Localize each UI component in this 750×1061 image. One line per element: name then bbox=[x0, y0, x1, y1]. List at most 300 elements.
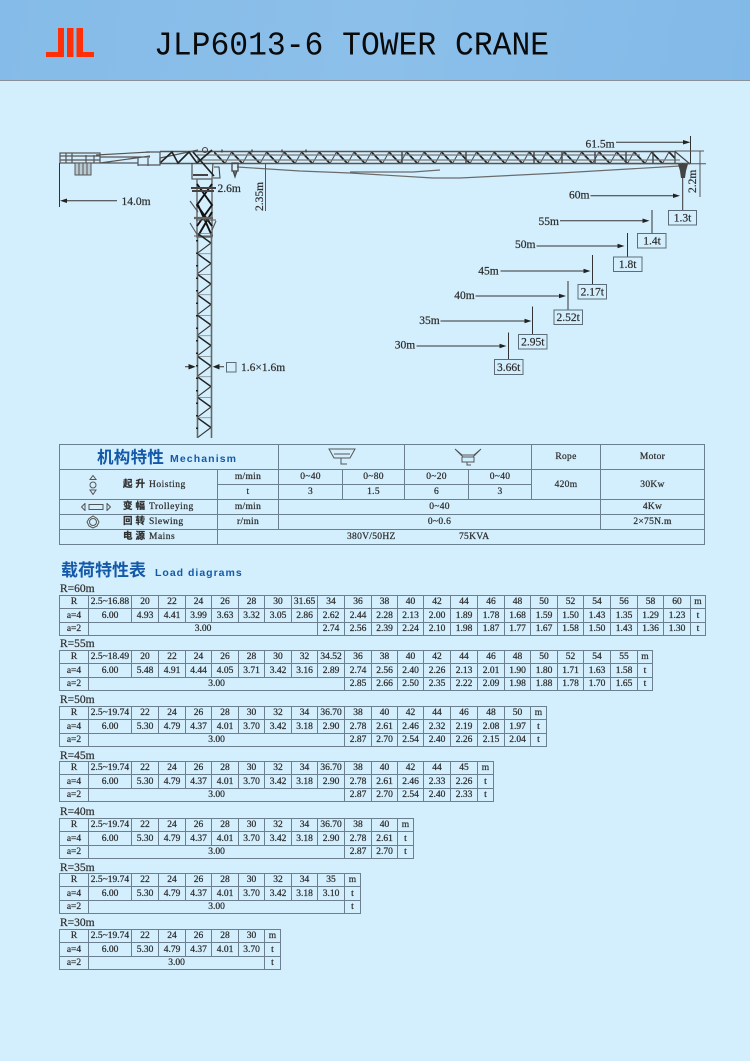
load table R=45m: 42 bbox=[406, 763, 415, 773]
load table R=40m: a=2 bbox=[67, 847, 81, 857]
mechanism heading: 机构特性 bbox=[97, 449, 164, 467]
mechanism table: 3 bbox=[308, 487, 313, 497]
counter jib bbox=[60, 150, 198, 166]
mechanism table: m/min bbox=[235, 502, 261, 512]
load table R=50m: 4.79 bbox=[164, 722, 180, 732]
load table R=45m: 2.78 bbox=[350, 777, 366, 787]
mechanism table: Trolleying bbox=[149, 502, 194, 512]
load table R=60m: 1.36 bbox=[642, 624, 659, 634]
mechanism table: 2×75N.m bbox=[633, 517, 672, 527]
load table R=45m: 28 bbox=[220, 763, 230, 773]
load table R=45m: 6.00 bbox=[102, 777, 118, 787]
load table R=40m: 26 bbox=[194, 820, 203, 830]
load table R=55m: 2.40 bbox=[402, 666, 419, 676]
load table R=60m: 3.99 bbox=[190, 611, 207, 621]
load table R=50m: 5.30 bbox=[137, 722, 153, 732]
load table R=55m: 2.5~18.49 bbox=[91, 652, 129, 662]
load table R=50m: a=2 bbox=[67, 735, 81, 745]
mechanism table: 6 bbox=[434, 487, 439, 497]
load table R=55m: 6.00 bbox=[102, 666, 118, 676]
load table R=40m: 36.70 bbox=[320, 820, 342, 830]
load table R=30m: 4.37 bbox=[190, 945, 207, 955]
load table R=55m: 2.66 bbox=[376, 679, 393, 689]
load table R=60m: R bbox=[71, 597, 77, 607]
load table R=45m: 36.70 bbox=[320, 763, 342, 773]
load table R=60m: 20 bbox=[140, 597, 150, 607]
load table R=60m: 38 bbox=[380, 597, 389, 607]
load table R=60m: 24 bbox=[194, 597, 203, 607]
load table R=60m: 52 bbox=[566, 597, 575, 607]
load marker: 50m 1.8t: 50m bbox=[515, 239, 536, 251]
load marker: 35m 2.95t: 35m bbox=[419, 315, 440, 327]
load table R=35m: 35 bbox=[326, 875, 336, 885]
load table R=40m: 40 bbox=[380, 820, 389, 830]
load table R=35m: 28 bbox=[220, 875, 230, 885]
load table R=50m: 2.15 bbox=[483, 735, 499, 745]
mechanism table bbox=[59, 444, 705, 545]
load table R=50m: 32 bbox=[273, 708, 283, 718]
load table R=60m: 2.28 bbox=[376, 611, 393, 621]
load table R=45m: 30 bbox=[247, 763, 256, 773]
load table R=55m: 52 bbox=[566, 652, 575, 662]
load table R=35m: R bbox=[71, 875, 77, 885]
load table R=50m: 22 bbox=[140, 708, 150, 718]
load table R=50m: 2.70 bbox=[376, 735, 393, 745]
load table R=60m: 3.32 bbox=[243, 611, 260, 621]
load table R=55m: 5.48 bbox=[137, 666, 153, 676]
load table R=60m: 4.93 bbox=[137, 611, 153, 621]
load table R=60m: t bbox=[697, 624, 699, 634]
load table R=35m: 34 bbox=[300, 875, 309, 885]
load table R=55m: 30 bbox=[273, 652, 283, 662]
load table R=55m: 26 bbox=[220, 652, 230, 662]
dimension: 2.2m bbox=[600, 151, 706, 197]
load table R=30m bbox=[59, 929, 281, 970]
load table R=60m: 1.35 bbox=[616, 611, 632, 621]
mechanism table: 420m bbox=[555, 480, 577, 490]
load table R=60m: 1.29 bbox=[642, 611, 659, 621]
load table R=45m: 2.46 bbox=[402, 777, 419, 787]
load table R=50m: t bbox=[537, 722, 540, 732]
load table R=40m: 2.78 bbox=[350, 834, 366, 844]
load table R=45m: 24 bbox=[167, 763, 177, 773]
load table R=60m: 31.65 bbox=[294, 597, 315, 607]
load table R=45m: 2.5~19.74 bbox=[91, 763, 129, 773]
load table R=55m: 2.89 bbox=[323, 666, 339, 676]
load table R=45m: 2.61 bbox=[376, 777, 393, 787]
load marker: 40m 2.52t bbox=[454, 281, 582, 324]
load diagrams heading: 载荷特性表 bbox=[61, 561, 146, 580]
load table R=50m: 2.32 bbox=[429, 722, 445, 732]
counterweight bbox=[75, 163, 91, 175]
mast size 1.6 x 1.6m bbox=[185, 362, 285, 374]
load table R=40m: t bbox=[404, 847, 407, 857]
mechanism table: 0~40 bbox=[490, 472, 510, 482]
load table R=40m: 3.18 bbox=[296, 834, 313, 844]
load marker: 35m 2.95t bbox=[419, 306, 547, 349]
load table R=50m: 2.78 bbox=[350, 722, 366, 732]
load table R=55m: 22 bbox=[167, 652, 177, 662]
load table R=60m: 56 bbox=[619, 597, 629, 607]
mechanism heading bbox=[97, 448, 237, 467]
load table R=30m: 5.30 bbox=[137, 945, 153, 955]
load table R=45m: 2.26 bbox=[456, 777, 472, 787]
load table R=55m: 3.42 bbox=[270, 666, 286, 676]
load table R=60m: 2.44 bbox=[350, 611, 366, 621]
load table R=55m: 1.98 bbox=[509, 679, 526, 689]
load table R=45m: 26 bbox=[194, 763, 203, 773]
load table R=60m: 22 bbox=[167, 597, 177, 607]
load table R=30m: R bbox=[71, 931, 77, 941]
load table R=30m: 26 bbox=[194, 931, 203, 941]
dimension: 61.5m bbox=[586, 136, 690, 164]
load table R=45m: a=2 bbox=[67, 790, 81, 800]
load table R=60m: t bbox=[697, 611, 699, 621]
load table R=60m: 1.23 bbox=[669, 611, 685, 621]
dimension: 2.2m: 2.2m bbox=[687, 170, 699, 193]
load table R=50m: 3.18 bbox=[296, 722, 313, 732]
mechanism heading: Mechanism bbox=[170, 453, 237, 465]
load table R=50m: 36.70 bbox=[320, 708, 342, 718]
icon: double trolley hook bbox=[454, 448, 482, 466]
load table R=50m: 28 bbox=[220, 708, 230, 718]
load table R=55m: t bbox=[644, 666, 646, 676]
label R=40m: R=40m bbox=[60, 806, 95, 818]
load table R=55m: 40 bbox=[406, 652, 415, 662]
mechanism table: 30Kw bbox=[640, 480, 665, 490]
mechanism table: Mains bbox=[149, 532, 175, 542]
load table R=35m: 3.00 bbox=[208, 902, 225, 912]
load table R=55m: 1.65 bbox=[616, 679, 632, 689]
load table R=50m bbox=[59, 706, 547, 747]
load table R=55m: m bbox=[641, 652, 649, 662]
load table R=55m: 2.85 bbox=[350, 679, 366, 689]
load table R=40m: 3.70 bbox=[243, 834, 260, 844]
load table R=60m: m bbox=[694, 597, 702, 607]
load marker: 60m 1.3t bbox=[569, 190, 696, 225]
load table R=55m: 2.26 bbox=[429, 666, 445, 676]
load table R=50m: 38 bbox=[353, 708, 363, 718]
load marker: 40m 2.52t: 40m bbox=[454, 290, 475, 302]
load table R=50m: 2.08 bbox=[483, 722, 499, 732]
load table R=60m: 44 bbox=[459, 597, 469, 607]
load marker: 50m 1.8t: 1.8t bbox=[619, 259, 637, 271]
load table R=45m: 38 bbox=[353, 763, 363, 773]
jib truss bbox=[160, 150, 690, 164]
load table R=30m: 4.79 bbox=[164, 945, 180, 955]
load table R=60m: 1.98 bbox=[456, 624, 472, 634]
load table R=60m bbox=[59, 595, 706, 636]
mechanism table: r/min bbox=[237, 517, 259, 527]
load table R=45m: 3.42 bbox=[270, 777, 286, 787]
load table R=50m: 34 bbox=[300, 708, 309, 718]
load table R=60m: 2.10 bbox=[429, 624, 445, 634]
load table R=50m: a=4 bbox=[67, 722, 81, 732]
load table R=55m: 1.88 bbox=[536, 679, 552, 689]
load table R=30m: 30 bbox=[247, 931, 256, 941]
label R=50m: R=50m bbox=[60, 694, 95, 706]
load table R=55m: 3.16 bbox=[296, 666, 313, 676]
load table R=55m: 2.50 bbox=[402, 679, 419, 689]
load table R=40m: 2.61 bbox=[376, 834, 393, 844]
load table R=60m: 3.00 bbox=[195, 624, 211, 634]
load table R=40m: 38 bbox=[353, 820, 363, 830]
load table R=50m: 48 bbox=[486, 708, 496, 718]
icon: hoisting bbox=[89, 475, 97, 495]
load table R=50m: 3.42 bbox=[270, 722, 286, 732]
header band bbox=[0, 0, 750, 81]
load table R=55m: R bbox=[71, 652, 77, 662]
label R=35m: R=35m bbox=[60, 862, 95, 874]
load table R=55m: a=4 bbox=[67, 666, 81, 676]
load table R=60m: 2.74 bbox=[323, 624, 339, 634]
load table R=60m: 30 bbox=[273, 597, 283, 607]
load table R=55m: 1.71 bbox=[562, 666, 579, 676]
load table R=50m: 2.87 bbox=[350, 735, 366, 745]
load table R=55m: 1.80 bbox=[536, 666, 552, 676]
load table R=55m bbox=[59, 650, 653, 691]
dimension: 14.0m bbox=[60, 163, 151, 208]
load table R=55m: 4.05 bbox=[217, 666, 233, 676]
mechanism table: 0~40 bbox=[429, 502, 450, 512]
load table R=35m: 4.01 bbox=[217, 889, 233, 899]
mechanism table: 电源 bbox=[123, 532, 148, 542]
load table R=50m: 1.97 bbox=[509, 722, 526, 732]
load table R=55m: 1.63 bbox=[589, 666, 605, 676]
mechanism table: 回转 bbox=[123, 517, 148, 527]
load table R=55m: 1.90 bbox=[509, 666, 526, 676]
load table R=35m: 4.79 bbox=[164, 889, 180, 899]
load table R=45m: R bbox=[71, 763, 77, 773]
load table R=45m: 44 bbox=[432, 763, 442, 773]
load marker: 45m 2.17t bbox=[478, 255, 606, 299]
load table R=60m: 1.43 bbox=[616, 624, 632, 634]
load table R=60m: 28 bbox=[247, 597, 256, 607]
load table R=45m: t bbox=[484, 777, 487, 787]
load marker: 60m 1.3t: 1.3t bbox=[674, 212, 692, 224]
load marker: 55m 1.4t: 55m bbox=[538, 216, 559, 228]
load table R=45m: 2.40 bbox=[429, 790, 445, 800]
load table R=50m: 50 bbox=[513, 708, 522, 718]
load table R=50m: 6.00 bbox=[102, 722, 118, 732]
crane elevation drawing bbox=[59, 136, 706, 438]
load table R=55m: 1.70 bbox=[589, 679, 605, 689]
load table R=60m: 1.87 bbox=[483, 624, 499, 634]
load table R=35m: t bbox=[351, 889, 354, 899]
load table R=50m: 2.90 bbox=[323, 722, 339, 732]
mechanism table: Motor bbox=[640, 452, 665, 462]
load table R=55m: 34.52 bbox=[320, 652, 342, 662]
mechanism table: 3 bbox=[497, 487, 503, 497]
load table R=40m: 2.5~19.74 bbox=[91, 820, 129, 830]
load table R=45m: 34 bbox=[300, 763, 309, 773]
load table R=40m: 24 bbox=[167, 820, 177, 830]
load table R=60m: 26 bbox=[220, 597, 230, 607]
load diagrams heading: Load diagrams bbox=[155, 567, 243, 579]
load table R=50m: 3.70 bbox=[243, 722, 260, 732]
load table R=55m: 24 bbox=[194, 652, 203, 662]
load table R=50m: 2.19 bbox=[456, 722, 472, 732]
load table R=35m: 6.00 bbox=[102, 889, 118, 899]
load table R=45m: m bbox=[482, 763, 489, 773]
title: JLP6013-6 TOWER CRANE bbox=[154, 27, 549, 65]
load table R=55m: t bbox=[644, 679, 646, 689]
mast size 1.6 x 1.6m: 1.6×1.6m bbox=[241, 362, 285, 374]
load table R=55m: 2.09 bbox=[483, 679, 499, 689]
load table R=45m: 3.00 bbox=[208, 790, 225, 800]
dimension: 2.35m bbox=[254, 163, 266, 211]
load table R=35m: 24 bbox=[167, 875, 177, 885]
icon: single trolley hook bbox=[328, 448, 356, 464]
load table R=60m: 2.86 bbox=[296, 611, 313, 621]
load table R=55m: 28 bbox=[247, 652, 256, 662]
load table R=60m: 3.05 bbox=[270, 611, 286, 621]
load table R=55m: 2.01 bbox=[483, 666, 499, 676]
load table R=30m: 24 bbox=[167, 931, 177, 941]
load table R=50m: t bbox=[537, 735, 540, 745]
load table R=60m: 46 bbox=[486, 597, 496, 607]
load table R=45m: 40 bbox=[380, 763, 389, 773]
load table R=55m: 2.22 bbox=[456, 679, 472, 689]
load table R=50m: 44 bbox=[432, 708, 442, 718]
load marker: 30m 3.66t: 3.66t bbox=[497, 362, 521, 374]
load table R=45m: 45 bbox=[459, 763, 469, 773]
load table R=55m: 3.00 bbox=[208, 679, 225, 689]
load table R=50m: 42 bbox=[406, 708, 415, 718]
load table R=50m: 46 bbox=[459, 708, 469, 718]
load table R=60m: 3.63 bbox=[217, 611, 233, 621]
climbing cage bbox=[190, 175, 216, 237]
load table R=50m: m bbox=[535, 708, 542, 718]
load table R=55m: 38 bbox=[380, 652, 389, 662]
load table R=40m: 2.90 bbox=[323, 834, 339, 844]
load table R=35m: t bbox=[351, 902, 354, 912]
load marker: 30m 3.66t: 30m bbox=[395, 340, 415, 352]
mechanism table: 4Kw bbox=[643, 502, 662, 512]
load table R=55m: 3.71 bbox=[243, 666, 260, 676]
load table R=30m: 28 bbox=[220, 931, 230, 941]
load table R=60m: 1.78 bbox=[483, 611, 499, 621]
load table R=40m: 6.00 bbox=[102, 834, 118, 844]
load table R=55m: 32 bbox=[300, 652, 309, 662]
load table R=35m bbox=[59, 873, 361, 914]
load table R=50m: 4.37 bbox=[190, 722, 207, 732]
load table R=35m: 5.30 bbox=[137, 889, 153, 899]
label R=60m: R=60m bbox=[60, 583, 95, 595]
load table R=60m: 1.50 bbox=[589, 624, 605, 634]
load table R=30m: a=2 bbox=[67, 958, 81, 968]
load table R=60m: 54 bbox=[592, 597, 602, 607]
mechanism table: 1.5 bbox=[367, 487, 380, 497]
load table R=60m: 2.00 bbox=[429, 611, 445, 621]
load table R=50m: 2.46 bbox=[402, 722, 419, 732]
mechanism table: t bbox=[247, 487, 249, 497]
logo bbox=[46, 28, 94, 57]
load table R=35m: 2.5~19.74 bbox=[91, 875, 129, 885]
icon: trolleying bbox=[81, 503, 111, 511]
load table R=60m: 1.30 bbox=[669, 624, 685, 634]
load table R=55m: 48 bbox=[513, 652, 522, 662]
load table R=35m: a=2 bbox=[67, 902, 81, 912]
load table R=60m: 40 bbox=[406, 597, 415, 607]
load table R=60m: 34 bbox=[326, 597, 336, 607]
load table R=55m: 1.58 bbox=[616, 666, 632, 676]
load table R=55m: 44 bbox=[459, 652, 469, 662]
load table R=50m: 40 bbox=[380, 708, 389, 718]
mechanism table: m/min bbox=[235, 472, 261, 482]
dimension: 2.35m: 2.35m bbox=[254, 182, 266, 211]
label R=55m: R=55m bbox=[60, 638, 95, 650]
load table R=35m: 32 bbox=[273, 875, 283, 885]
load table R=30m: t bbox=[271, 958, 274, 968]
load table R=35m: 22 bbox=[140, 875, 150, 885]
load marker: 45m 2.17t: 2.17t bbox=[581, 286, 605, 298]
load table R=45m: a=4 bbox=[67, 777, 81, 787]
label R=30m: R=30m bbox=[60, 917, 95, 929]
load table R=40m: t bbox=[404, 834, 407, 844]
load table R=60m: 2.24 bbox=[402, 624, 419, 634]
load table R=60m: 48 bbox=[513, 597, 522, 607]
load table R=55m: 46 bbox=[486, 652, 496, 662]
load table R=45m: 5.30 bbox=[137, 777, 153, 787]
load marker: 55m 1.4t bbox=[538, 210, 666, 248]
load table R=30m: 4.01 bbox=[217, 945, 233, 955]
load table R=60m: 6.00 bbox=[102, 611, 118, 621]
label R=45m: R=45m bbox=[60, 750, 95, 762]
load table R=35m: 3.70 bbox=[243, 889, 260, 899]
load table R=40m: 2.70 bbox=[376, 847, 393, 857]
load table R=30m: t bbox=[271, 945, 274, 955]
load table R=45m: 32 bbox=[273, 763, 283, 773]
load table R=60m: 50 bbox=[539, 597, 549, 607]
mechanism table: 0~80 bbox=[363, 472, 384, 482]
load table R=35m: 30 bbox=[247, 875, 256, 885]
load table R=60m: 1.68 bbox=[509, 611, 526, 621]
load table R=35m: 3.18 bbox=[296, 889, 313, 899]
load table R=40m: 4.79 bbox=[164, 834, 180, 844]
load table R=60m: 1.67 bbox=[536, 624, 552, 634]
load table R=45m: 3.70 bbox=[243, 777, 260, 787]
load marker: 60m 1.3t: 60m bbox=[569, 190, 590, 202]
load table R=40m: 30 bbox=[247, 820, 256, 830]
mechanism table: Rope bbox=[555, 452, 577, 462]
load table R=45m: 2.87 bbox=[350, 790, 366, 800]
load marker: 40m 2.52t: 2.52t bbox=[557, 312, 581, 324]
load marker: 50m 1.8t bbox=[515, 233, 642, 272]
load table R=50m: 30 bbox=[247, 708, 256, 718]
load table R=45m: 3.18 bbox=[296, 777, 313, 787]
load table R=60m: 42 bbox=[432, 597, 442, 607]
mechanism table: Hoisting bbox=[149, 480, 186, 490]
load table R=35m: 3.10 bbox=[323, 889, 339, 899]
load table R=60m: 58 bbox=[646, 597, 655, 607]
mechanism table: 0~40 bbox=[300, 472, 321, 482]
load table R=55m: 20 bbox=[140, 652, 150, 662]
load table R=55m: 4.44 bbox=[190, 666, 207, 676]
load diagrams heading bbox=[61, 561, 243, 580]
load table R=60m: 36 bbox=[353, 597, 363, 607]
tower mast bbox=[197, 233, 212, 438]
mechanism table: 起升 bbox=[123, 480, 148, 490]
load table R=30m: m bbox=[269, 931, 276, 941]
load table R=50m: 24 bbox=[167, 708, 177, 718]
load table R=40m: 22 bbox=[140, 820, 150, 830]
load table R=55m: 55 bbox=[619, 652, 629, 662]
load table R=45m: 2.70 bbox=[376, 790, 393, 800]
load table R=45m: 4.79 bbox=[164, 777, 180, 787]
dimension: 61.5m: 61.5m bbox=[586, 138, 615, 150]
load table R=50m: 2.04 bbox=[509, 735, 526, 745]
